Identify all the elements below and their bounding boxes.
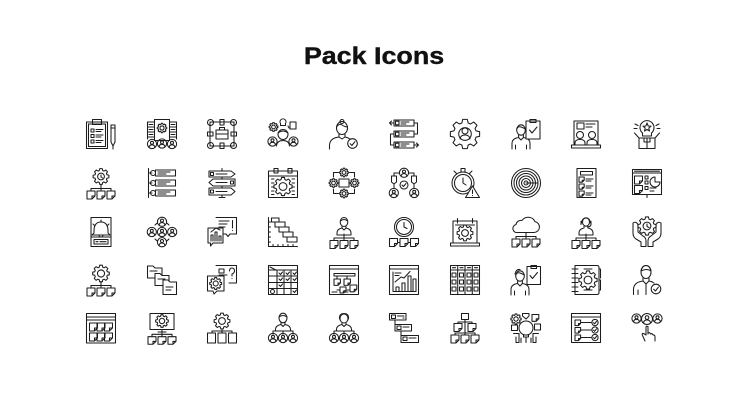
icon: four gears process — [329, 168, 359, 198]
icon: three avatars with pointing hand — [632, 313, 662, 341]
icon: gear with note tree — [87, 265, 115, 296]
icon: woman with clipboard check — [511, 266, 540, 295]
icon: person with ideas around — [268, 119, 298, 146]
icon: man over three avatars — [268, 313, 298, 343]
icon: window with six notes — [86, 314, 116, 343]
icon: laptop calendar with gear — [450, 218, 480, 246]
icon: hands holding gear clock — [633, 217, 661, 246]
icon: kanban board — [450, 266, 480, 294]
icon: clock gear tree — [87, 169, 115, 199]
icon: gantt staircase — [268, 218, 298, 246]
icon: ring of five avatars — [147, 217, 177, 247]
icon: laptop with two people — [572, 121, 600, 148]
icon: window with chart notes — [330, 266, 358, 294]
icon: chats with gear and question — [208, 266, 236, 294]
icon: person and note tree — [330, 218, 358, 248]
title: Pack Icons — [304, 43, 444, 70]
icon: three stepped folders — [148, 266, 176, 294]
icon: man with clipboard check — [512, 120, 540, 149]
icon: phone with bell — [91, 218, 111, 246]
icon: monitor gear tree — [148, 314, 176, 344]
icon: gear above three columns — [208, 313, 236, 343]
icon: square network with briefcase — [208, 120, 236, 148]
icon: calendar with gear — [268, 168, 298, 198]
icon: clock with chain of notes — [390, 218, 418, 246]
icon: support agent tree — [572, 218, 600, 248]
icon: woman with check badge — [330, 120, 357, 149]
icon: clipboard checklist with pen — [86, 120, 115, 149]
icon: woman over three avatars — [329, 314, 359, 343]
icon: calendar table with checks — [268, 266, 298, 294]
icon: spiral notebook with gear — [572, 266, 600, 294]
icon: org document with stacks and three avatars — [147, 120, 177, 149]
icon: hierarchy tree of notes — [451, 314, 479, 343]
icon: window checklist — [572, 314, 600, 342]
icon: man with check badge — [634, 266, 661, 294]
icon: stepped linked tags — [390, 314, 418, 342]
icon: cloud tree — [512, 217, 540, 247]
icon: arrow process rows — [390, 120, 418, 148]
icon: tall checklist document — [577, 168, 596, 198]
icon: avatars with notes and check — [389, 168, 419, 198]
icon: bulb with ideas ring — [511, 314, 540, 342]
icon: presentation board with notes — [632, 170, 662, 198]
icon: stopwatch with warning — [452, 168, 480, 198]
icon: vertical timeline tags — [148, 168, 176, 198]
icon: gear with person — [450, 119, 480, 149]
icon: window with bar chart — [390, 266, 418, 294]
icon: signpost — [209, 168, 235, 198]
icon: concentric target maze — [512, 168, 540, 198]
icon: chat with chart and alert — [208, 218, 236, 246]
icon: lightbulb rising from box — [634, 121, 660, 148]
